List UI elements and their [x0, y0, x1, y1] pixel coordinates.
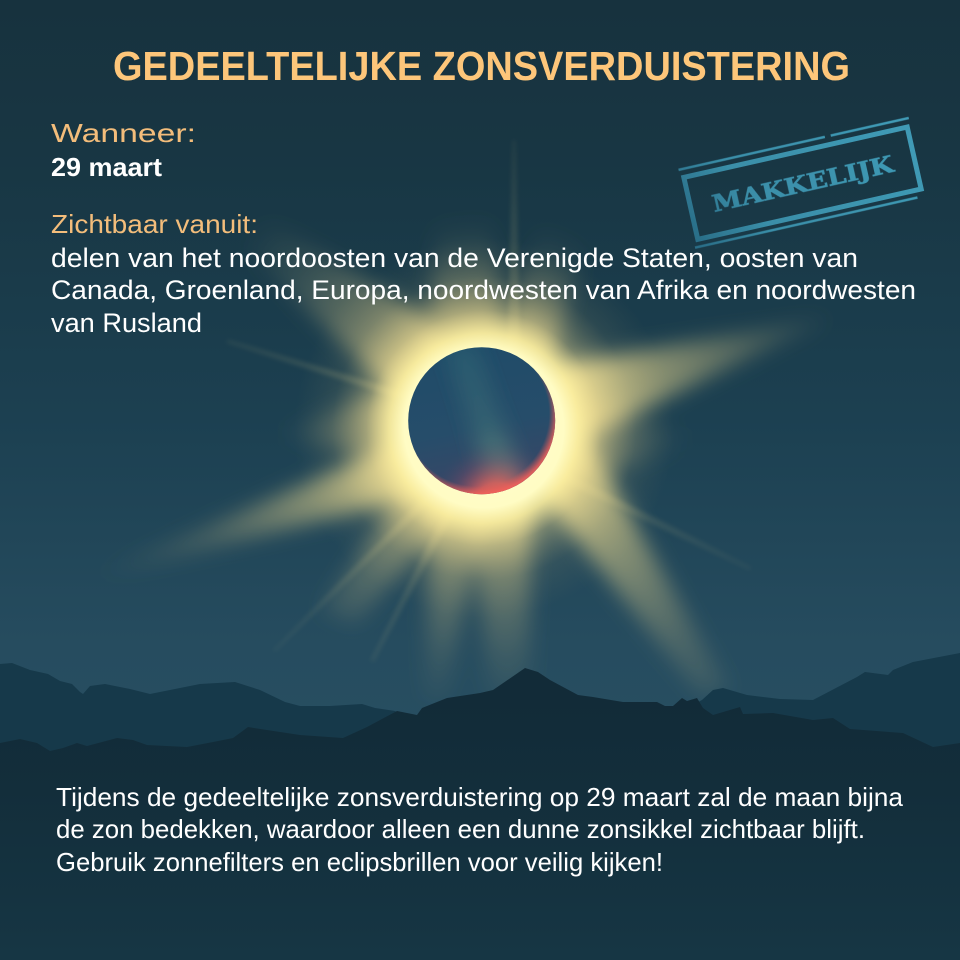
visibility text: Canada, Groenland, Europa, noordwesten van Afrika en noordwesten [51, 275, 916, 305]
description text: Tijdens de gedeeltelijke zonsverduistering op 29 maart zal de maan bijna [56, 782, 904, 812]
stamp: difficulty [678, 118, 926, 248]
visibility text: van Rusland [51, 308, 202, 338]
date: 29 maart [51, 152, 162, 182]
description text: Gebruik zonnefilters en eclipsbrillen voor veilig kijken! [56, 847, 663, 877]
title: GEDEELTELIJKE ZONSVERDUISTERING [113, 43, 850, 89]
description text [56, 782, 904, 877]
back mountain range [0, 653, 960, 770]
visibility text [51, 243, 916, 338]
sun corona rays [85, 140, 830, 700]
sun glow [294, 238, 674, 618]
visibility label: Zichtbaar vanuit: [51, 209, 258, 239]
front mountain range [0, 668, 960, 960]
description text: de zon bedekken, waardoor alleen een dunne zonsikkel zichtbaar blijft. [56, 814, 865, 844]
moon disc [408, 347, 556, 494]
stamp: difficulty: MAKKELIJK [710, 151, 897, 218]
visibility text: delen van het noordoosten van de Verenigde Staten, oosten van [51, 243, 858, 273]
when label: Wanneer: [51, 118, 196, 148]
